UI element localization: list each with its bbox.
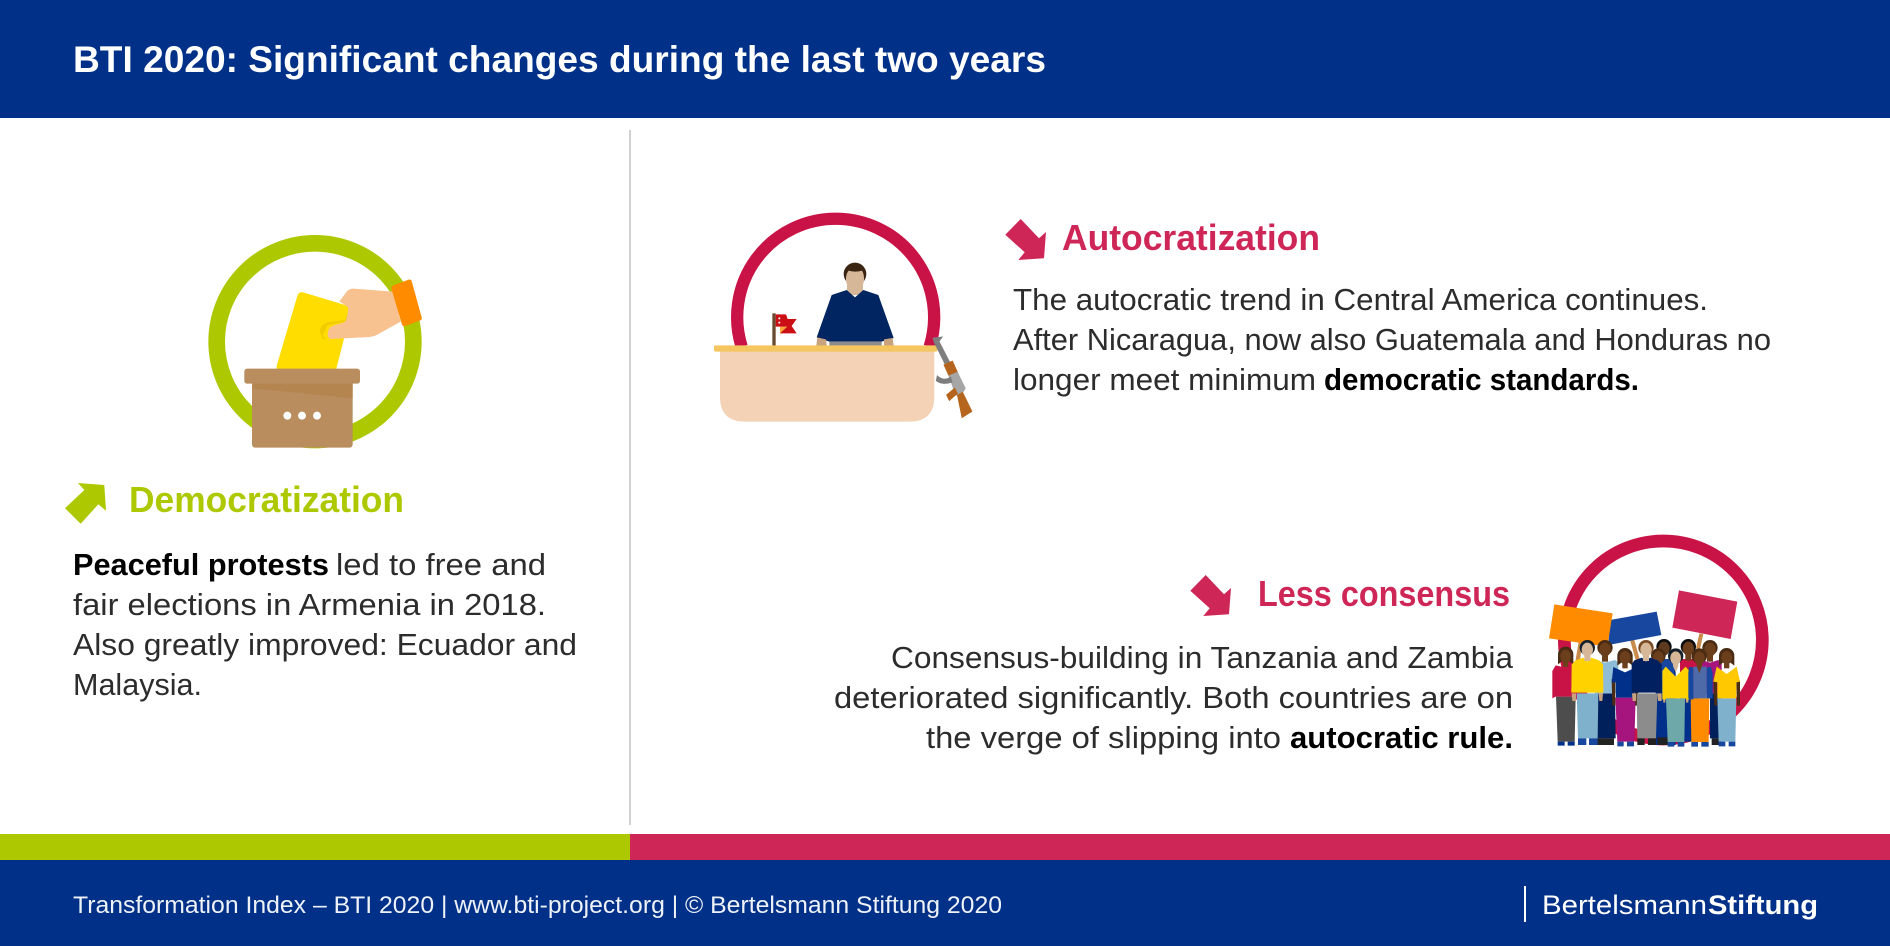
logo: Bertelsmann Stiftung (1524, 886, 1818, 922)
text: autocratization body: The autocratic trend in Central America continues. (1013, 282, 1708, 317)
text: less consensus body: deteriorated significantly. Both countries are on (834, 680, 1513, 715)
panel: less consensus (834, 541, 1762, 755)
title: BTI 2020: Significant changes during the last two years (73, 39, 1046, 80)
text: less consensus body (834, 640, 1514, 755)
source line: Transformation Index – BTI 2020 | www.bti-project.org | © Bertelsmann Stiftung 2020 (73, 892, 1002, 919)
text: democratization body: fair elections in Armenia in 2018. (73, 587, 546, 622)
heading: Democratization: Democratization (129, 479, 404, 520)
text: autocratization body: After Nicaragua, now also Guatemala and Honduras no (1013, 322, 1771, 357)
text: democratization body: Malaysia. (73, 667, 202, 702)
logo: Bertelsmann Stiftung: Bertelsmann (1542, 890, 1707, 920)
text: less consensus body: autocratic rule. (1290, 720, 1513, 755)
icon: ballot box with hand (217, 243, 422, 448)
logo: Bertelsmann Stiftung: Stiftung (1708, 890, 1818, 920)
icon: arrow down-right (1005, 219, 1046, 260)
text: democratization body: Peaceful protests (73, 547, 329, 582)
text: autocratization body (1013, 282, 1771, 397)
text: less consensus body: Consensus-building in Tanzania and Zambia (891, 640, 1514, 675)
text: democratization body: led to free and (336, 547, 546, 582)
icon: protesting crowd (1549, 541, 1762, 747)
colour bar (0, 834, 1890, 860)
text: less consensus body: the verge of slipping into (926, 720, 1281, 755)
footer band (0, 860, 1890, 946)
text: democratization body (73, 547, 577, 702)
text: autocratization body: longer meet minimum (1013, 362, 1316, 397)
heading: Autocratization: Autocratization (1062, 217, 1320, 258)
panel: autocratization (714, 217, 1771, 422)
icon: man at desk with rifle (714, 219, 972, 422)
heading: Less consensus: Less consensus (1258, 573, 1510, 614)
panel: democratization (65, 243, 577, 702)
icon: arrow up-right (65, 483, 106, 524)
header band (0, 0, 1890, 118)
icon: arrow down-right (1190, 575, 1231, 616)
text: democratization body: Also greatly improved: Ecuador and (73, 627, 577, 662)
text: autocratization body: democratic standards. (1324, 362, 1639, 397)
